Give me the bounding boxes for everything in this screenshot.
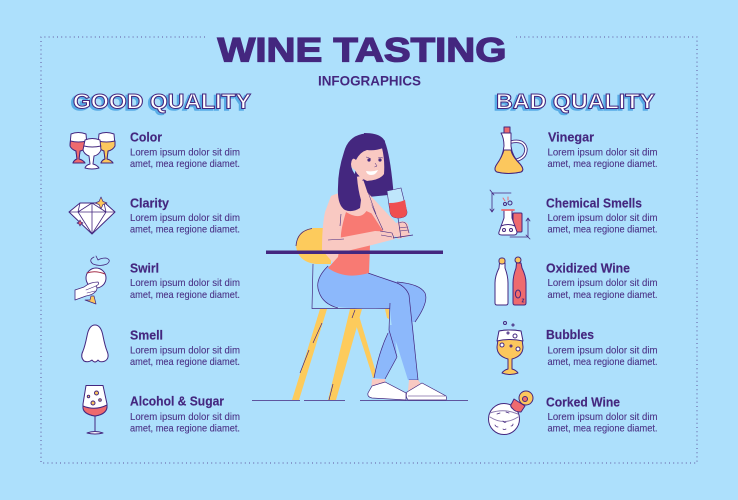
- text: clarity: Lorem ipsum dolor sit dim: [130, 212, 240, 224]
- text: chemical smells: amet, mea regione diamet.: [548, 224, 658, 236]
- title: [218, 32, 506, 88]
- text: swirl: Lorem ipsum dolor sit dim: [130, 277, 240, 289]
- icon: oxidized wine bottles: [495, 257, 526, 305]
- icon: nose: [82, 325, 108, 362]
- illustration: woman tasting wine at table: [252, 133, 468, 400]
- text: chemical smells: Chemical Smells: [546, 196, 642, 210]
- icon: corked wine flask: [488, 391, 533, 434]
- text: color: amet, mea regione diamet.: [130, 158, 240, 170]
- text: swirl: Swirl: [130, 260, 159, 276]
- subtitle: INFOGRAPHICS: [318, 72, 421, 88]
- icon: diamond: [69, 197, 115, 234]
- back ankle and shoe: [368, 379, 406, 400]
- forearm: [324, 231, 395, 252]
- arms and torso skin: [322, 191, 398, 265]
- text: color: Lorem ipsum dolor sit dim: [130, 146, 240, 158]
- text: chemical smells: [546, 196, 658, 236]
- front leg and hips: [318, 266, 418, 380]
- back leg: [374, 282, 426, 379]
- text: oxidized wine: amet, mea regione diamet.: [548, 289, 658, 301]
- icon: bubbling wine glass: [497, 322, 523, 374]
- text: smell: Smell: [130, 328, 163, 342]
- icon: swirl glass: [75, 256, 109, 304]
- icon: alcohol and sugar glass: [83, 386, 107, 434]
- text: smell: amet, mea regione diamet.: [130, 356, 240, 368]
- table: [266, 250, 443, 254]
- heading: good quality: GOOD QUALITY: [73, 90, 251, 114]
- icon: chemical flask: [490, 190, 530, 239]
- text: color: [130, 130, 240, 170]
- text: corked wine: Lorem ipsum dolor sit dim: [548, 411, 658, 423]
- heading: good quality: GOOD QUALITY: [71, 92, 249, 115]
- heading: bad quality: BAD QUALITY: [494, 92, 653, 115]
- text: oxidized wine: Oxidized Wine: [546, 260, 630, 276]
- text: alcohol and sugar: [130, 394, 240, 434]
- back hair: [352, 133, 393, 197]
- front hair: [338, 134, 385, 211]
- title: WINE TASTING: [218, 32, 506, 70]
- icon: three wine glasses: [70, 132, 115, 169]
- text: corked wine: [546, 394, 658, 434]
- wine glass: [387, 188, 413, 238]
- icon: vinegar carafe: [495, 127, 526, 174]
- text: bubbles: Lorem ipsum dolor sit dim: [548, 344, 658, 356]
- text: clarity: Clarity: [130, 196, 170, 210]
- hand: [392, 221, 410, 239]
- neck and face: [355, 176, 375, 215]
- text: corked wine: Corked Wine: [546, 394, 620, 410]
- text: vinegar: Vinegar: [548, 130, 594, 144]
- text: vinegar: amet, mea regione diamet.: [548, 158, 658, 170]
- text: clarity: amet, mea regione diamet.: [130, 224, 240, 236]
- text: vinegar: [548, 130, 658, 170]
- heading: bad quality: BAD QUALITY: [496, 90, 655, 114]
- text: clarity: [130, 196, 240, 236]
- chair: [292, 228, 390, 400]
- text: color: Color: [130, 130, 162, 144]
- text: swirl: [130, 260, 240, 301]
- text: corked wine: amet, mea regione diamet.: [548, 422, 658, 434]
- text: swirl: amet, mea regione diamet.: [130, 289, 240, 301]
- fingers: [399, 222, 409, 233]
- text: alcohol and sugar: Lorem ipsum dolor sit dim: [130, 411, 240, 423]
- ground line: [252, 400, 468, 402]
- text: chemical smells: Lorem ipsum dolor sit dim: [548, 212, 658, 224]
- panel: good quality list: [69, 130, 240, 434]
- text: vinegar: Lorem ipsum dolor sit dim: [548, 146, 658, 158]
- text: smell: [130, 328, 240, 368]
- panel: bad quality list: [488, 127, 658, 434]
- text: smell: Lorem ipsum dolor sit dim: [130, 344, 240, 356]
- text: oxidized wine: Lorem ipsum dolor sit dim: [548, 277, 658, 289]
- text: bubbles: Bubbles: [546, 327, 594, 342]
- text: oxidized wine: [546, 260, 658, 301]
- text: alcohol and sugar: Alcohol & Sugar: [130, 394, 224, 408]
- front ankle and shoe: [406, 380, 446, 400]
- text: alcohol and sugar: amet, mea regione diamet.: [130, 422, 240, 434]
- face details: [362, 157, 383, 181]
- text: bubbles: amet, mea regione diamet.: [548, 356, 658, 368]
- text: bubbles: [546, 327, 658, 368]
- coral top: [328, 208, 383, 276]
